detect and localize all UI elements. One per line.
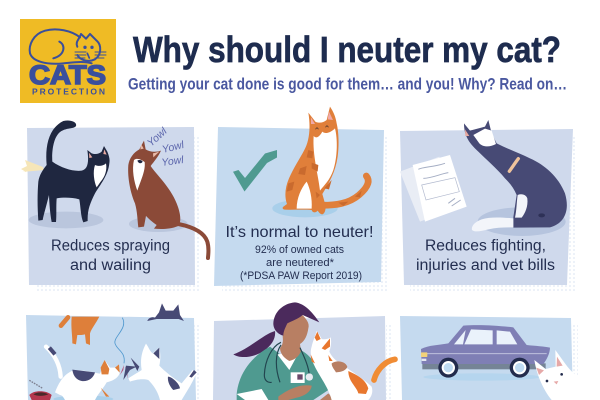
caption: Reduces spraying: [51, 238, 170, 254]
panel: normal to neuter: [214, 107, 387, 292]
caption: Reduces fighting,: [425, 238, 546, 254]
yowl text: Yowl: [145, 125, 170, 149]
icon: ginger cat: [272, 107, 368, 217]
icon: spray: [21, 160, 44, 172]
logo: Cats Protection: [20, 19, 116, 103]
icon: brown cat wailing: [128, 141, 209, 258]
yowl text: Yowl: [161, 139, 186, 156]
illustration: playing cats: [29, 303, 197, 400]
illustration: car and white cat: [421, 325, 595, 400]
caption: [226, 224, 374, 282]
icon: green check mark: [233, 150, 277, 192]
caption: [416, 238, 555, 274]
logo wordmark CATS: CATS: [29, 60, 106, 90]
panel: vet with cat: [213, 302, 395, 400]
yowl text: [145, 125, 186, 169]
caption: It’s normal to neuter!: [226, 224, 374, 241]
yowl text: Yowl: [161, 154, 185, 169]
panel: car: [400, 316, 595, 400]
panel: fighting, injuries and vet bills: [400, 120, 577, 291]
caption: (*PDSA PAW Report 2019): [240, 270, 362, 282]
caption: 92% of owned cats: [255, 244, 344, 256]
icon: black and white cat: [29, 120, 110, 228]
panel: reduces spraying and wailing: [21, 120, 209, 291]
illustration: vet holding cat: [233, 302, 395, 400]
panel: playful cats: [26, 303, 201, 400]
caption: [51, 238, 170, 274]
icon: vet bill papers: [400, 155, 467, 222]
icon: injured dark cat: [464, 120, 567, 236]
caption: are neutered*: [266, 257, 335, 269]
caption: and wailing: [70, 257, 151, 274]
logo cat outline: [30, 29, 106, 64]
caption: injuries and vet bills: [416, 257, 555, 274]
logo wordmark PROTECTION: PROTECTION: [32, 86, 105, 96]
